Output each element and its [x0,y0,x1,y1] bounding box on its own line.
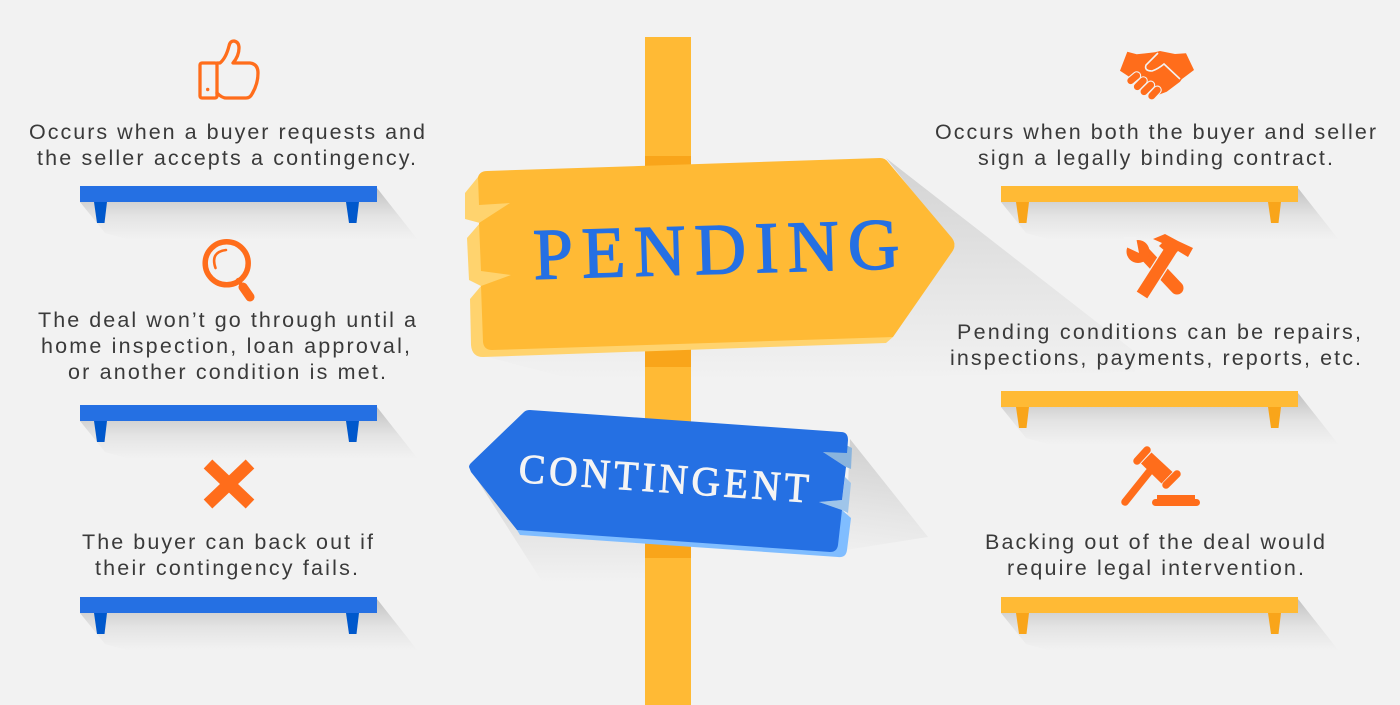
shelf [1001,186,1339,240]
panel: pending point 3 [985,450,1339,651]
sign label: PENDING [532,204,900,295]
shelf [80,186,418,240]
shelf [80,405,418,459]
sign face [469,410,848,552]
shelf [1001,597,1339,651]
description: The deal won’t go through until a [38,308,416,332]
description: Occurs when both the buyer and seller [935,120,1376,144]
icon: gavel [1125,450,1200,506]
sign face [478,158,954,350]
description: or another condition is met. [68,360,386,384]
signpost [645,37,691,705]
panel: pending point 1 [935,51,1376,240]
description: their contingency fails. [95,556,358,580]
shelf [1001,391,1339,445]
sign back layer [517,510,851,557]
panel: contingent point 3 [80,464,418,651]
panel: contingent point 2 [38,242,418,459]
sign back layer [465,177,893,357]
description [935,120,1376,170]
shelf [80,597,418,651]
icon: magnifying glass [205,242,250,297]
description: the seller accepts a contingency. [37,146,416,170]
description: Backing out of the deal would [985,530,1325,554]
description: inspections, payments, reports, etc. [950,346,1361,370]
description: require legal intervention. [1007,556,1304,580]
upper shard [823,445,852,469]
description: Occurs when a buyer requests and [29,120,425,144]
description: home inspection, loan approval, [41,334,410,358]
middle shard [819,477,851,513]
description: Pending conditions can be repairs, [957,320,1361,344]
description [950,320,1361,370]
panel: pending point 2 [950,234,1361,445]
description [38,308,416,384]
sign label: CONTINGENT [517,445,811,511]
sign shadow: pending [480,158,1135,382]
description: The buyer can back out if [82,530,373,554]
sign: contingent [469,410,852,557]
icon: hammer and wrench [1124,234,1193,295]
icon: thumbs up [200,41,258,98]
sign: pending [465,158,954,357]
icon: cross [208,464,250,504]
panel: contingent point 1 [29,41,425,240]
description [985,530,1325,580]
description [82,530,373,580]
description [29,120,425,170]
description: sign a legally binding contract. [978,146,1333,170]
icon: handshake [1120,51,1194,96]
sign shadow: contingent right [640,439,928,574]
sign shadow: contingent left [471,470,650,583]
